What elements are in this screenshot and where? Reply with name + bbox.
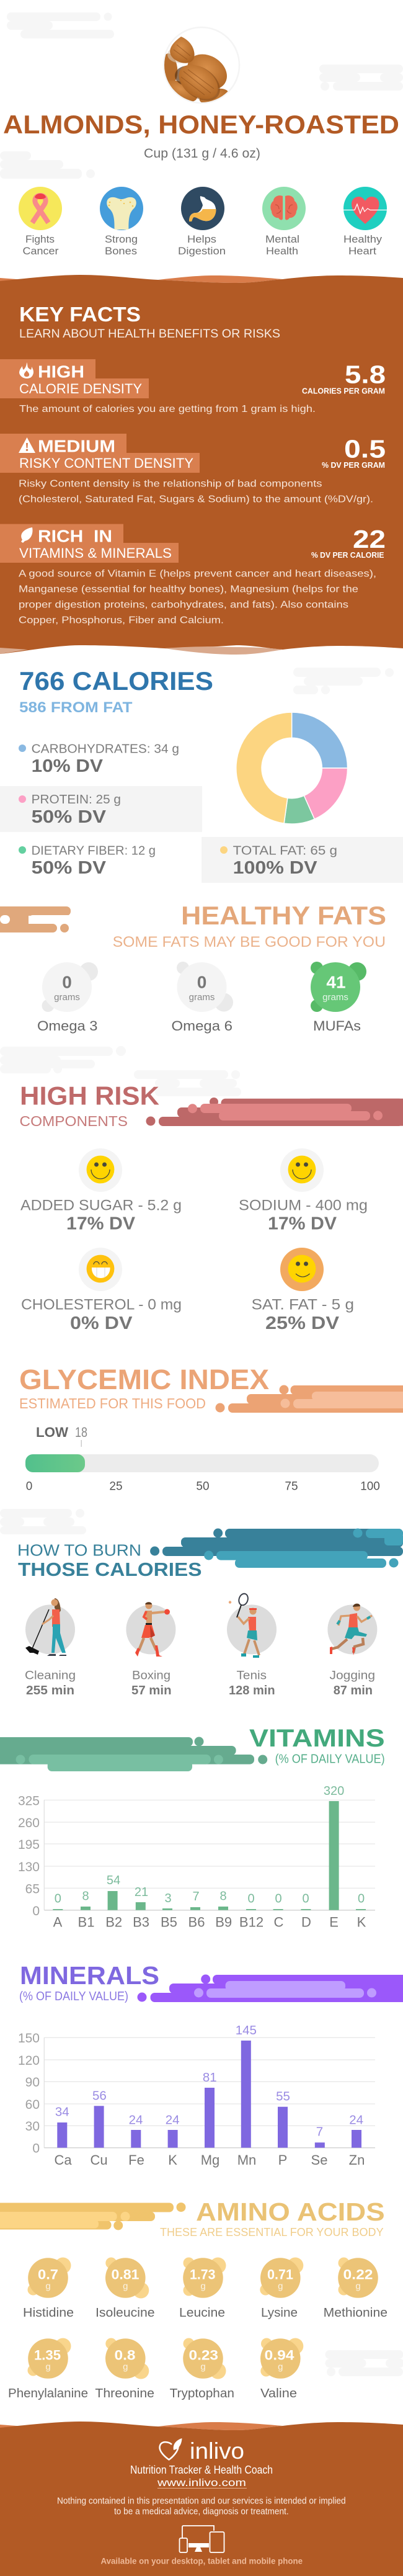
bar chart: vitamins: 195: [18, 1838, 40, 1852]
heading: glycemic index: GLYCEMIC INDEX: [19, 1364, 269, 1395]
decoration: high risk band: [146, 1098, 403, 1126]
amino: threonine: 0.8: [114, 2348, 135, 2363]
fact: high calorie density: 5.8: [345, 360, 386, 389]
label: cleaning: 255 min: [26, 1684, 74, 1697]
glycemic label: [36, 1424, 87, 1447]
bar chart: vitamins: 0: [358, 1892, 365, 1906]
heading: how to burn: THOSE CALORIES: [18, 1559, 202, 1580]
amino: leucine: 1.73: [190, 2267, 216, 2282]
bar chart: minerals: Mg: [201, 2152, 219, 2168]
macro: dietary fiber: DIETARY FIBER: 12 g: [32, 844, 156, 857]
bar chart: minerals: P: [278, 2152, 287, 2168]
amino: valine: g: [278, 2361, 283, 2373]
decoration: burn band: [150, 1529, 403, 1568]
heading: minerals: MINERALS: [20, 1961, 159, 1990]
fat: omega 6: 0: [197, 973, 206, 992]
icon: devices: [180, 2526, 224, 2552]
label: cleaning: Cleaning: [25, 1669, 76, 1682]
label: helps digestion: [178, 233, 226, 257]
amino: tryptophan: Tryptophan: [170, 2387, 234, 2400]
amino: tryptophan: 0.23: [188, 2348, 218, 2363]
fact: rich in vitamins and minerals: Manganese (essential for healthy bones), Magnesium (helps for the: [19, 584, 358, 594]
panel: key facts: [0, 275, 403, 658]
bar chart: vitamins: E: [329, 1915, 339, 1930]
glycemic axis: 75: [285, 1480, 298, 1493]
bar chart: vitamins: 260: [18, 1816, 40, 1830]
macro: total fat: [202, 837, 403, 883]
heading: amino acids: AMINO ACIDS: [196, 2198, 385, 2226]
glycemic axis: [26, 1480, 380, 1493]
label: mental health: Mental: [265, 233, 299, 245]
food photo: almonds: [161, 27, 239, 108]
fact: rich in vitamins and minerals: RICH IN: [38, 527, 112, 546]
bar chart: vitamins: K: [357, 1915, 366, 1930]
bar chart: vitamins: C: [273, 1915, 283, 1930]
risk: saturated fat: 25% DV: [265, 1313, 340, 1333]
risk: added sugar: 17% DV: [66, 1214, 136, 1234]
amino: valine: Valine: [260, 2387, 297, 2400]
label: helps digestion: Digestion: [178, 245, 226, 257]
amino: leucine: [179, 2257, 226, 2320]
label: fights cancer: Fights: [25, 233, 55, 245]
macro: carbohydrates: [19, 742, 179, 776]
heading: calories: 766 CALORIES: [19, 666, 213, 695]
label: boxing: [131, 1669, 171, 1697]
label: cleaning: [25, 1669, 76, 1697]
fat: omega 6: [171, 962, 233, 1034]
label: jogging: 87 min: [334, 1684, 373, 1697]
heading: vitamins: [249, 1725, 385, 1766]
fact: high calorie density: HIGH: [38, 362, 84, 381]
amino: isoleucine: g: [123, 2281, 128, 2292]
amino: lysine: 0.71: [267, 2267, 293, 2282]
section: vitamins: [0, 1725, 385, 1930]
bar chart: vitamins: B9: [215, 1915, 232, 1930]
label: helps digestion: Helps: [187, 233, 216, 245]
title: ALMONDS, HONEY-ROASTED: [3, 110, 399, 139]
icon: flame: [19, 362, 33, 378]
icon: mental health: [262, 187, 306, 230]
section: minerals: [18, 1961, 403, 2168]
section: amino acids: [0, 2198, 388, 2400]
amino: histidine: Histidine: [23, 2306, 74, 2320]
bar chart: minerals: 0: [32, 2142, 40, 2155]
macro: protein: PROTEIN: 25 g: [32, 793, 121, 807]
amino: methionine: [324, 2257, 388, 2320]
bar chart: minerals: Ca: [55, 2152, 72, 2168]
risk: sodium: SODIUM - 400 mg: [239, 1197, 368, 1214]
bar chart: vitamins: 3: [164, 1892, 172, 1905]
tagline: www.inlivo.com: [157, 2477, 246, 2489]
fact: rich in vitamins and minerals: proper digestion proteins, carbohydrates, and fats). Also contains: [19, 599, 348, 610]
bar chart: vitamins: 0: [55, 1892, 61, 1906]
amino: threonine: g: [123, 2361, 128, 2373]
macro: carbohydrates: CARBOHYDRATES: 34 g: [32, 742, 179, 756]
heading: healthy fats: HEALTHY FATS: [181, 901, 386, 930]
risk: cholesterol: CHOLESTEROL - 0 mg: [21, 1297, 182, 1313]
bar chart: vitamins: 0: [275, 1892, 282, 1906]
heading: how to burn: HOW TO BURN: [17, 1541, 141, 1560]
amino: methionine: g: [355, 2281, 361, 2292]
bar chart: minerals: 24: [129, 2113, 143, 2127]
fact: medium risky content density: (Cholesterol, Saturated Fat, Sugars & Sodium) to the amount (%DV/gr).: [19, 494, 373, 504]
fact: rich in vitamins and minerals: [0, 524, 386, 626]
bar chart: vitamins: 0: [247, 1892, 255, 1906]
label: boxing: 57 min: [131, 1684, 171, 1697]
amino: leucine: g: [200, 2281, 206, 2292]
serving size: Cup (131 g / 4.6 oz): [144, 146, 260, 161]
fat: omega 6: grams: [189, 992, 215, 1003]
heading: vitamins: (% OF DAILY VALUE): [275, 1752, 385, 1766]
glycemic axis: 100: [360, 1480, 380, 1493]
label: boxing: Boxing: [132, 1669, 170, 1682]
bar chart: vitamins: 7: [192, 1890, 200, 1903]
bar chart: minerals: Cu: [91, 2152, 108, 2168]
tagline: [130, 2464, 273, 2489]
bar chart: vitamins: B2: [105, 1915, 122, 1930]
heading: key facts: KEY FACTS: [19, 303, 141, 326]
bar chart: minerals: 24: [349, 2113, 363, 2127]
bar chart: minerals: Fe: [128, 2152, 144, 2168]
macro: protein: 50% DV: [32, 807, 107, 827]
fact: rich in vitamins and minerals: 22: [353, 525, 386, 553]
bar chart: minerals: 7: [316, 2125, 323, 2139]
fact: high calorie density: The amount of calories you are getting from 1 gram is high.: [19, 404, 316, 414]
bar chart: vitamins: 8: [219, 1890, 227, 1903]
label: mental health: Health: [266, 245, 298, 257]
fat: mufas: grams: [322, 992, 348, 1003]
macro: protein: [0, 786, 202, 832]
fact: medium risky content density: 0.5: [344, 434, 386, 463]
fact: medium risky content density: MEDIUM: [38, 437, 115, 456]
section: high risk components: [20, 1081, 403, 1333]
fat: omega 3: 0: [62, 973, 72, 992]
risk: added sugar: [20, 1148, 182, 1234]
fat: mufas: MUFAs: [313, 1018, 361, 1034]
amino: lysine: Lysine: [261, 2306, 298, 2320]
fact: high calorie density: CALORIES PER GRAM: [302, 387, 385, 396]
heading: calories: [19, 666, 213, 716]
risk: sodium: 17% DV: [268, 1214, 337, 1234]
bar chart: minerals: 81: [203, 2070, 217, 2085]
heading: calories: 586 FROM FAT: [19, 699, 133, 716]
amino: threonine: [95, 2338, 154, 2400]
amino: tryptophan: [170, 2338, 234, 2400]
glycemic axis: 50: [196, 1480, 210, 1493]
amino: lysine: [260, 2257, 303, 2320]
label: strong bones: Bones: [105, 245, 137, 257]
bar chart: vitamins: 320: [324, 1784, 344, 1798]
amino: phenylalanine: 1.35: [34, 2348, 61, 2363]
fat: omega 3: Omega 3: [37, 1018, 98, 1034]
amino: phenylalanine: Phenylalanine: [8, 2387, 88, 2400]
risk: added sugar: ADDED SUGAR - 5.2 g: [20, 1197, 182, 1214]
label: tennis: 128 min: [229, 1684, 275, 1697]
macro: carbohydrates: 10% DV: [32, 756, 104, 776]
fact: medium risky content density: [0, 434, 386, 504]
exercise: boxing: [126, 1602, 175, 1657]
heading: minerals: [19, 1961, 159, 2003]
bar chart: minerals: 34: [55, 2105, 69, 2119]
bar chart: vitamins: 21: [135, 1885, 148, 1899]
bar chart: minerals: 120: [18, 2054, 40, 2068]
section: how to burn calories: [17, 1529, 403, 1697]
tagline: Nutrition Tracker & Health Coach: [130, 2464, 273, 2476]
heading: amino acids: [160, 2198, 385, 2238]
label: healthy heart: Heart: [348, 245, 376, 257]
disclaimer: Nothing contained in this presentation and our services is intended or implied: [57, 2497, 346, 2507]
section: glycemic index: [19, 1364, 403, 1493]
decoration: minerals band: [138, 1974, 403, 2002]
bar chart: vitamins: 0: [302, 1892, 309, 1906]
footer: [0, 2422, 403, 2576]
heading: healthy fats: SOME FATS MAY BE GOOD FOR YOU: [113, 934, 386, 950]
amino: phenylalanine: [8, 2338, 88, 2400]
bar chart: vitamins: B12: [239, 1915, 264, 1930]
heading: key facts: LEARN ABOUT HEALTH BENEFITS OR RISKS: [19, 327, 280, 341]
fat: mufas: [311, 962, 366, 1034]
bar chart: vitamins: 325: [18, 1794, 40, 1809]
risk: cholesterol: [21, 1248, 182, 1333]
heading: glycemic index: ESTIMATED FOR THIS FOOD: [19, 1395, 206, 1411]
heading: healthy fats: [113, 901, 386, 950]
heading: glycemic index: [19, 1364, 269, 1411]
fat: mufas: 41: [326, 973, 346, 992]
heading: high risk: [20, 1081, 159, 1129]
fat: omega 3: grams: [54, 992, 80, 1003]
fact: rich in vitamins and minerals: A good source of Vitamin E (helps prevent cancer and heart diseases),: [19, 569, 376, 579]
macro: total fat: TOTAL FAT: 65 g: [233, 844, 337, 857]
amino: valine: 0.94: [264, 2348, 294, 2363]
bar chart: minerals: 56: [92, 2088, 107, 2103]
exercise: tennis: [227, 1593, 277, 1658]
availability note: Available on your desktop, tablet and mobile phone: [100, 2556, 303, 2566]
exercise: jogging: [327, 1604, 377, 1655]
decoration: healthy fats band: [0, 906, 78, 932]
amino: methionine: 0.22: [343, 2267, 373, 2282]
amino: isoleucine: 0.81: [112, 2267, 139, 2282]
amino: valine: [260, 2338, 303, 2400]
bar chart: minerals: 55: [276, 2089, 290, 2103]
panel: health benefits: [19, 187, 387, 257]
fat: omega 6: Omega 6: [171, 1018, 232, 1034]
risk: sodium: [239, 1148, 368, 1234]
fact: rich in vitamins and minerals: VITAMINS & MINERALS: [19, 545, 172, 561]
heading: vitamins: VITAMINS: [249, 1725, 385, 1752]
bar chart: minerals: 60: [25, 2098, 40, 2112]
amino: tryptophan: g: [200, 2361, 206, 2373]
logo: inlivo: [160, 2438, 244, 2464]
amino: histidine: 0.7: [38, 2267, 58, 2282]
label: fights cancer: Cancer: [22, 245, 59, 257]
icon: fights cancer ribbon: [19, 187, 62, 230]
glycemic bar: [25, 1454, 379, 1472]
fact: medium risky content density: RISKY CONTENT DENSITY: [19, 455, 193, 471]
bar chart: vitamins: 65: [25, 1882, 40, 1896]
fat: omega 3: [37, 962, 98, 1034]
fact: medium risky content density: Risky Content density is the relationship of bad components: [19, 479, 322, 489]
fact: rich in vitamins and minerals: % DV PER CALORIE: [311, 551, 384, 560]
icon: helps digestion: [181, 187, 224, 230]
bar chart: vitamins: B6: [188, 1915, 205, 1930]
bar chart: minerals: Zn: [349, 2152, 365, 2168]
amino: phenylalanine: g: [45, 2361, 51, 2373]
amino: isoleucine: Isoleucine: [95, 2306, 155, 2320]
amino: lysine: g: [278, 2281, 283, 2292]
label: jogging: [330, 1669, 375, 1697]
bar chart: vitamins: 130: [18, 1860, 40, 1874]
macro: dietary fiber: [19, 844, 156, 878]
disclaimer: [57, 2497, 346, 2516]
amino: methionine: Methionine: [324, 2306, 388, 2320]
bar chart: vitamins: B5: [161, 1915, 177, 1930]
bar chart: minerals: 90: [25, 2075, 40, 2090]
label: healthy heart: Healthy: [343, 233, 383, 245]
bar chart: vitamins: 8: [82, 1890, 89, 1903]
icon: warning triangle: [19, 437, 35, 453]
label: mental health: [265, 233, 299, 257]
bar chart: minerals: K: [168, 2152, 177, 2168]
fact: rich in vitamins and minerals: Copper, Phosphorus, Fiber and Calcium.: [19, 615, 224, 626]
label: tennis: [229, 1669, 275, 1697]
risk: saturated fat: [252, 1248, 354, 1333]
glycemic axis: 0: [26, 1480, 32, 1493]
label: fights cancer: [22, 233, 59, 257]
glycemic axis: 25: [109, 1480, 123, 1493]
macro: total fat: 100% DV: [233, 858, 317, 878]
label: tennis: Tenis: [237, 1669, 267, 1682]
decoration: vitamins band: [0, 1737, 267, 1771]
icon: strong bones: [100, 187, 143, 230]
section: healthy fats: [0, 901, 386, 1034]
bar chart: minerals: 24: [166, 2113, 180, 2127]
logo: inlivo: inlivo: [190, 2438, 244, 2464]
amino: threonine: Threonine: [95, 2387, 154, 2400]
label: healthy heart: [343, 233, 383, 257]
bar chart: minerals: [18, 2023, 375, 2168]
bar chart: vitamins: A: [53, 1915, 63, 1930]
bar chart: vitamins: 54: [107, 1874, 120, 1887]
fact: high calorie density: [0, 359, 386, 414]
heading: key facts: [19, 303, 280, 341]
donut chart: macronutrients: [236, 712, 348, 824]
label: strong bones: [105, 233, 138, 257]
label: jogging: Jogging: [330, 1669, 375, 1682]
bar chart: vitamins: B1: [78, 1915, 94, 1930]
fact: high calorie density: CALORIE DENSITY: [19, 381, 142, 396]
heading: high risk: COMPONENTS: [20, 1113, 128, 1129]
fact: medium risky content density: % DV PER GRAM: [322, 461, 385, 470]
bar chart: vitamins: 0: [32, 1904, 40, 1918]
bar chart: minerals: 30: [25, 2119, 40, 2134]
disclaimer: to be a medical advice, diagnosis or treatment.: [114, 2507, 289, 2516]
heading: how to burn: [17, 1541, 202, 1580]
macro: dietary fiber: 50% DV: [32, 858, 107, 878]
bar chart: minerals: 145: [236, 2023, 257, 2037]
bar chart: vitamins: B3: [133, 1915, 149, 1930]
heading: high risk: HIGH RISK: [20, 1081, 159, 1111]
heading: amino acids: THESE ARE ESSENTIAL FOR YOUR BODY: [160, 2225, 384, 2238]
label: strong bones: Strong: [105, 233, 138, 245]
decoration: amino band: [0, 2203, 186, 2230]
glycemic label: LOW: [36, 1424, 68, 1440]
icon: leaf: [21, 527, 32, 543]
bar chart: vitamins: D: [301, 1915, 311, 1930]
amino: histidine: [23, 2257, 74, 2320]
bar chart: vitamins: [18, 1784, 375, 1930]
exercise: cleaning: [25, 1598, 75, 1656]
bar chart: minerals: 150: [18, 2031, 40, 2046]
amino: histidine: g: [45, 2281, 51, 2292]
heading: minerals: (% OF DAILY VALUE): [19, 1990, 128, 2003]
amino: leucine: Leucine: [179, 2306, 225, 2320]
glycemic label: 18: [75, 1424, 87, 1440]
bar chart: minerals: Se: [311, 2152, 327, 2168]
risk: cholesterol: 0% DV: [70, 1313, 133, 1333]
icon: healthy heart: [343, 187, 387, 230]
decoration: glycemic band: [216, 1385, 403, 1413]
amino: isoleucine: [95, 2257, 155, 2320]
bar chart: minerals: Mn: [237, 2152, 256, 2168]
risk: saturated fat: SAT. FAT - 5 g: [252, 1297, 354, 1313]
